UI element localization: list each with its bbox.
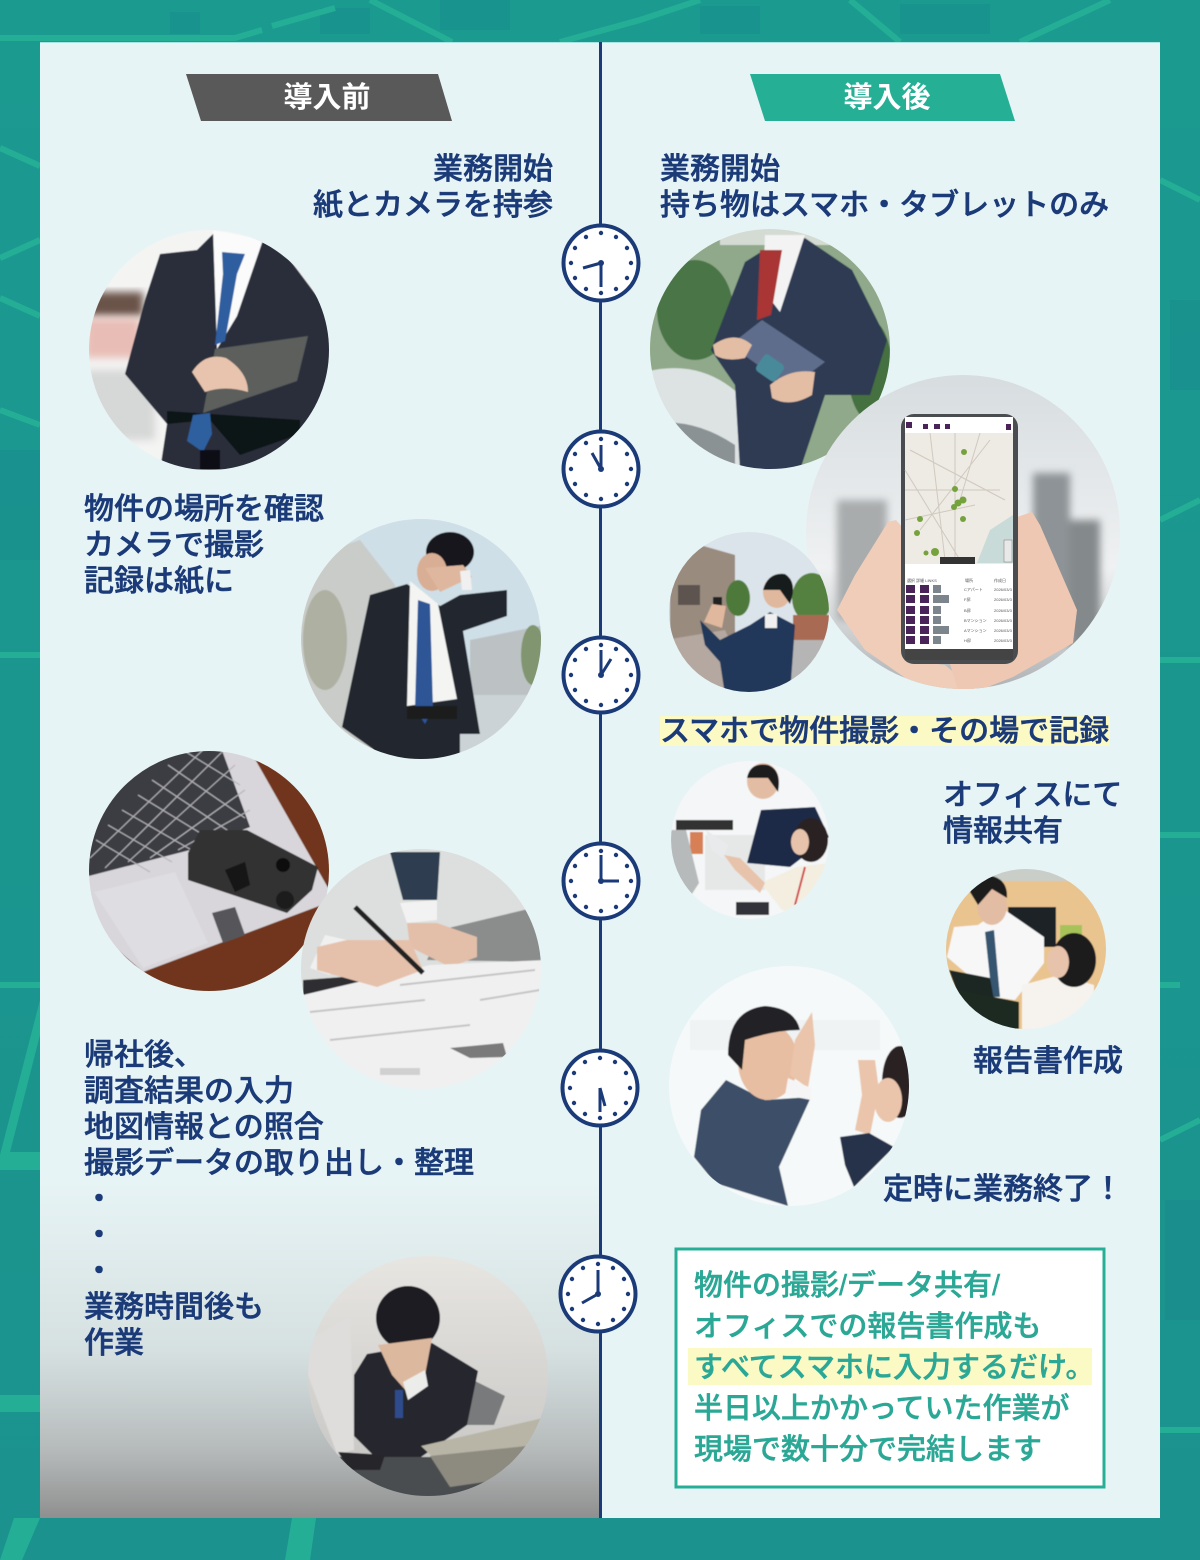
phone device: 2026/03/3 xyxy=(994,628,1013,633)
photo: high five xyxy=(665,962,918,1210)
clock 2 xyxy=(564,432,638,506)
text: highlighted, record on site: スマホで物件撮影・その場で記録 xyxy=(660,715,1109,748)
callout: summary box: 物件の撮影/データ共有/ xyxy=(694,1269,1001,1302)
photo: after, photographing with phone xyxy=(669,532,829,692)
text: before, after returning to office: 作業 xyxy=(84,1327,144,1360)
callout: summary box: オフィスでの報告書作成も xyxy=(694,1310,1041,1343)
photo: smartphone map app in hands xyxy=(807,375,1119,689)
phone device: 2026/03/3 xyxy=(994,587,1013,592)
heading: before: 導入前 xyxy=(283,81,371,114)
text: before, after returning to office: 撮影データの取り出し・整理 xyxy=(84,1147,474,1180)
photo: after, office sharing xyxy=(671,761,829,919)
phone device: 選択 詳細 LINKS xyxy=(907,577,937,583)
text: after, start of work: 持ち物はスマホ・タブレットのみ xyxy=(660,189,1109,222)
text: before, after returning to office: 調査結果の入力 xyxy=(84,1075,294,1108)
photo: man wiping sweat on street xyxy=(298,515,545,770)
callout: summary box: すべてスマホに入力するだけ。 xyxy=(694,1351,1094,1384)
text: after, finish on time: 定時に業務終了！ xyxy=(883,1173,1123,1206)
text: after, office sharing: 情報共有 xyxy=(943,815,1063,848)
photo: signing paper xyxy=(298,845,546,1095)
phone device: Cアパート xyxy=(964,587,983,592)
text: before, after returning to office: ・ xyxy=(84,1183,114,1216)
heading: after xyxy=(750,74,1015,121)
clock 3 xyxy=(564,638,638,712)
callout: summary box: 現場で数十分で完結します xyxy=(694,1433,1042,1466)
text: before, start of work: 紙とカメラを持参 xyxy=(313,189,553,222)
text: before, check location: カメラで撮影 xyxy=(84,529,264,562)
photo: tired man at desk xyxy=(300,1252,552,1502)
text: before, check location: 記録は紙に xyxy=(84,565,234,598)
phone device: 2026/03/3 xyxy=(994,638,1013,643)
phone device: Bマンション xyxy=(964,618,987,623)
callout: summary box xyxy=(676,1249,1104,1487)
phone device: F邸 xyxy=(964,596,970,602)
timeline axis xyxy=(599,42,602,1518)
text: before, after returning to office: 帰社後、 xyxy=(84,1039,204,1072)
photo: laptop and camera xyxy=(89,751,329,991)
clock 1 xyxy=(564,226,638,300)
photo: suit with tablet xyxy=(85,228,335,473)
clock 6 xyxy=(560,1256,636,1332)
text: before, after returning to office: ・ xyxy=(84,1219,114,1252)
phone device: B邸 xyxy=(964,607,971,613)
clock 5 xyxy=(562,1050,638,1126)
callout: summary box: 半日以上かかっていた作業が xyxy=(694,1392,1070,1425)
photo: after, man with tablet xyxy=(645,225,895,475)
phone device: Aマンション xyxy=(964,628,987,633)
text: after, start of work: 業務開始 xyxy=(660,153,780,186)
phone device: 2026/03/3 xyxy=(994,618,1013,623)
phone device: 場所 xyxy=(965,577,973,583)
phone device: 2026/03/3 xyxy=(994,597,1013,602)
clock 4 xyxy=(564,844,638,918)
phone device: H邸 xyxy=(964,637,971,643)
text: before, after returning to office: 地図情報との照合 xyxy=(84,1111,324,1144)
text: after, office sharing: オフィスにて xyxy=(943,779,1122,812)
phone device: 作成日 xyxy=(994,577,1006,583)
text: before, check location: 物件の場所を確認 xyxy=(84,493,324,526)
phone device xyxy=(901,414,1018,664)
text: before, after returning to office: ・ xyxy=(84,1255,114,1288)
heading: before xyxy=(186,74,452,121)
photo: after, report writing xyxy=(946,869,1106,1029)
text: before, after returning to office: 業務時間後も xyxy=(84,1291,264,1324)
heading: after: 導入後 xyxy=(843,81,931,114)
text: before, start of work: 業務開始 xyxy=(433,153,553,186)
text: after, report: 報告書作成 xyxy=(973,1045,1123,1078)
phone device: 2026/03/3 xyxy=(994,608,1013,613)
